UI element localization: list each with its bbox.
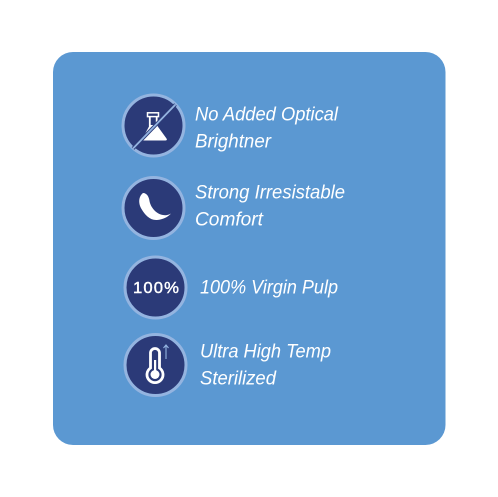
text: no added optical brightner: No Added Optical: [195, 104, 339, 126]
text: ultra high temp sterilized: Ultra High Temp: [200, 342, 331, 362]
text: 100% virgin pulp: 100% Virgin Pulp: [200, 278, 338, 298]
text: strong irresistable comfort: Comfort: [195, 210, 264, 230]
text: ultra high temp sterilized: Sterilized: [200, 368, 277, 390]
panel: blue card: [53, 52, 446, 445]
text: no added optical brightner: [195, 104, 339, 152]
icon: thermometer with up arrow: [125, 334, 186, 396]
text: strong irresistable comfort: Strong Irresistable: [195, 182, 345, 204]
icon: crossed-out flask: [123, 95, 184, 156]
text: strong irresistable comfort: [195, 182, 345, 230]
text: no added optical brightner: Brightner: [195, 132, 272, 152]
icon: 100% badge: [125, 257, 186, 318]
icon: feather: [123, 178, 184, 238]
text: ultra high temp sterilized: [200, 342, 331, 390]
icon: 100% badge: 100%: [133, 280, 180, 297]
